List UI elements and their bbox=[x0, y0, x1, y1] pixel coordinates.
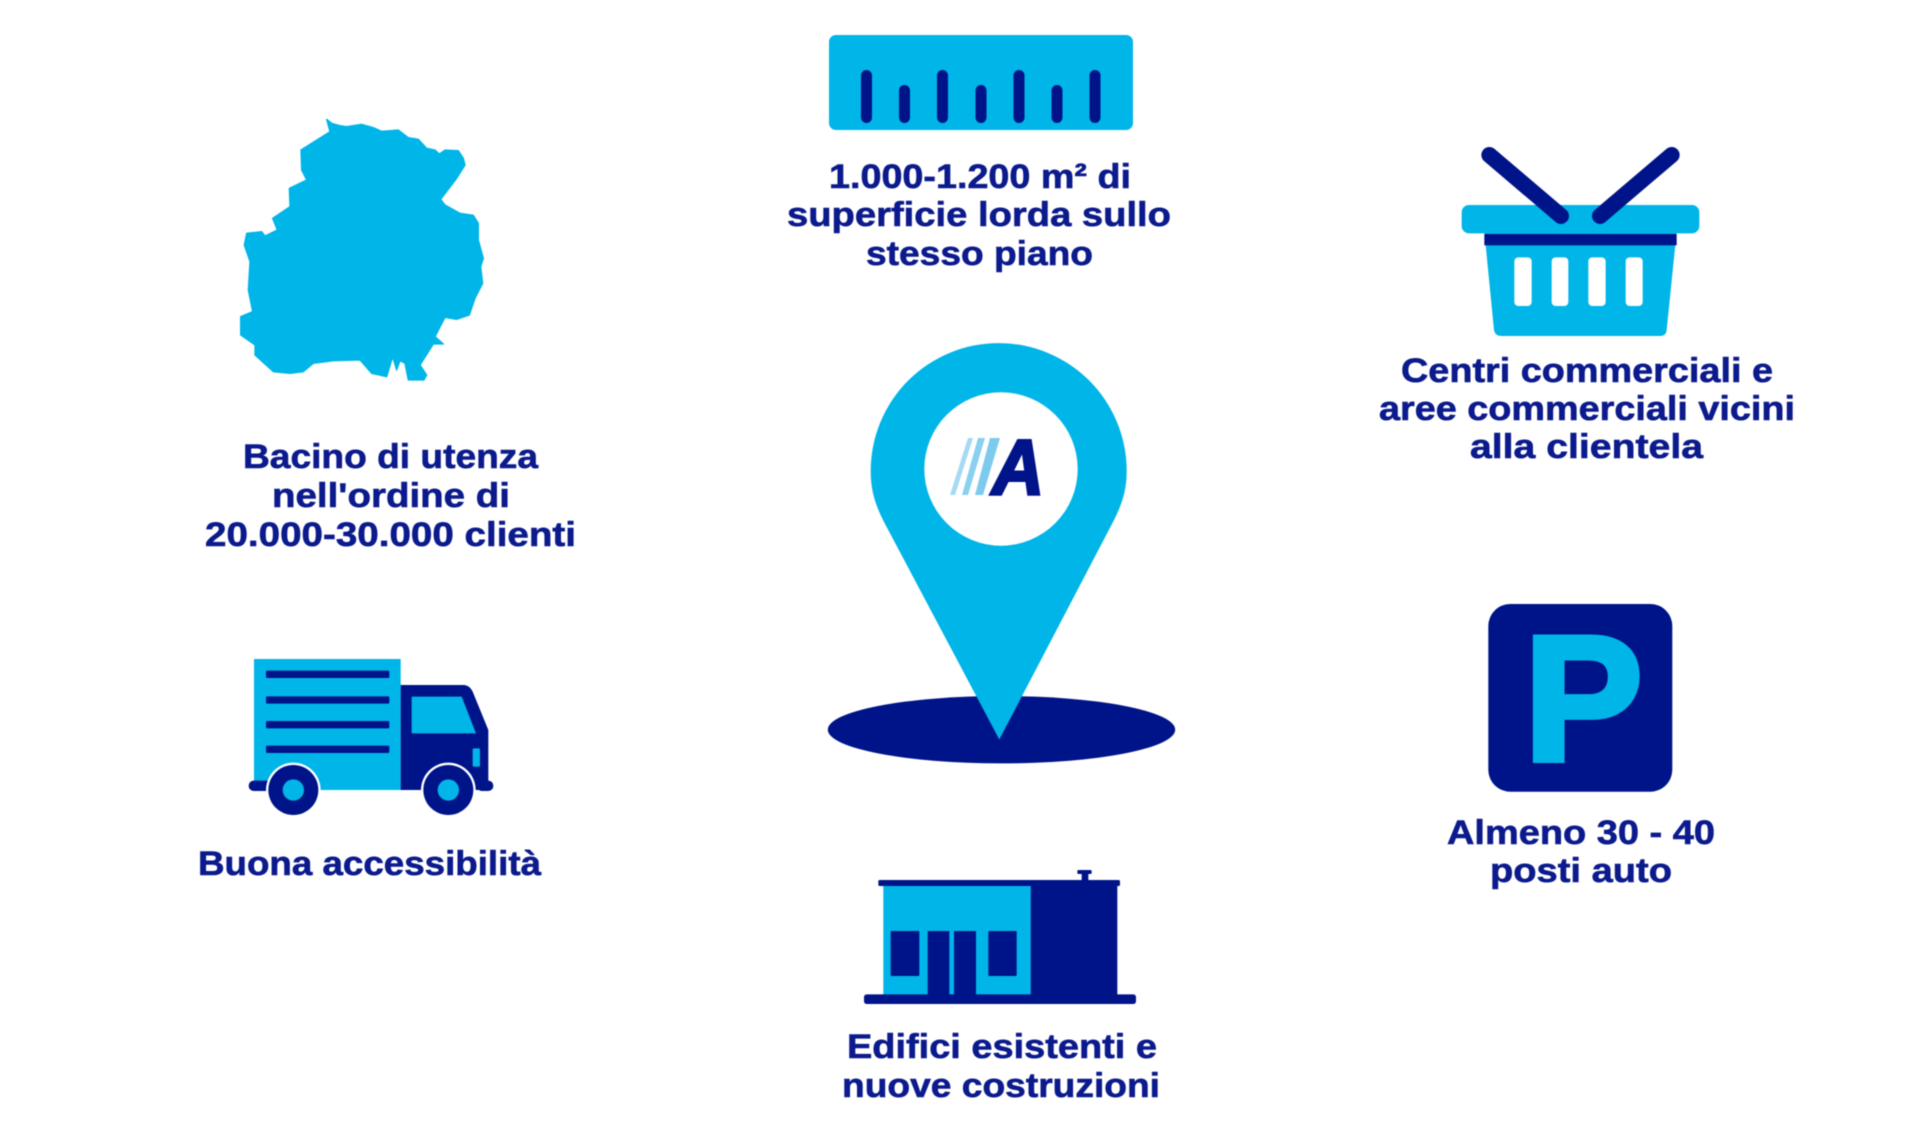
panel: floor area bbox=[787, 35, 1171, 273]
text: buildings: nuove costruzioni bbox=[842, 1067, 1160, 1105]
text: commercial areas: alla clientela bbox=[1470, 428, 1704, 466]
text: parking: Almeno 30 - 40 bbox=[1447, 814, 1715, 852]
text: commercial areas: aree commerciali vicini bbox=[1379, 390, 1795, 428]
text: commercial areas: Centri commerciali e bbox=[1401, 352, 1773, 390]
text: catchment area: nell'ordine di bbox=[272, 477, 510, 515]
pin shadow ellipse bbox=[828, 696, 1175, 763]
icon: territory map bbox=[241, 119, 483, 380]
text: parking bbox=[1447, 814, 1715, 890]
icon: parking sign bbox=[1488, 599, 1672, 798]
panel: accessibility bbox=[198, 659, 542, 883]
logo: A bbox=[990, 423, 1044, 511]
text: catchment area bbox=[205, 438, 576, 554]
text: floor area: stesso piano bbox=[866, 235, 1093, 273]
text: floor area: superficie lorda sullo bbox=[787, 196, 1171, 234]
icon: ruler bbox=[829, 35, 1133, 130]
text: accessibility: Buona accessibilità bbox=[198, 845, 542, 883]
icon: parking sign: P bbox=[1524, 599, 1643, 798]
text: catchment area: Bacino di utenza bbox=[243, 438, 539, 476]
text: parking: posti auto bbox=[1490, 852, 1672, 890]
panel: location pin bbox=[828, 343, 1175, 763]
text: catchment area: 20.000-30.000 clienti bbox=[205, 516, 576, 554]
text: floor area bbox=[787, 158, 1171, 273]
panel: parking bbox=[1447, 599, 1715, 890]
logo bbox=[950, 423, 1044, 511]
text: commercial areas bbox=[1379, 352, 1795, 466]
icon: building bbox=[864, 870, 1136, 1004]
pin inner circle bbox=[924, 392, 1078, 546]
icon: delivery truck bbox=[249, 659, 493, 817]
icon: shopping basket bbox=[1462, 155, 1699, 336]
panel: commercial areas bbox=[1379, 155, 1795, 466]
panel: catchment area bbox=[205, 119, 576, 554]
text: floor area: 1.000-1.200 m² di bbox=[829, 158, 1131, 196]
text: buildings: Edifici esistenti e bbox=[847, 1028, 1157, 1066]
text: buildings bbox=[842, 1028, 1160, 1105]
icon: map pin bbox=[871, 343, 1127, 740]
panel: existing and new buildings bbox=[842, 870, 1160, 1105]
